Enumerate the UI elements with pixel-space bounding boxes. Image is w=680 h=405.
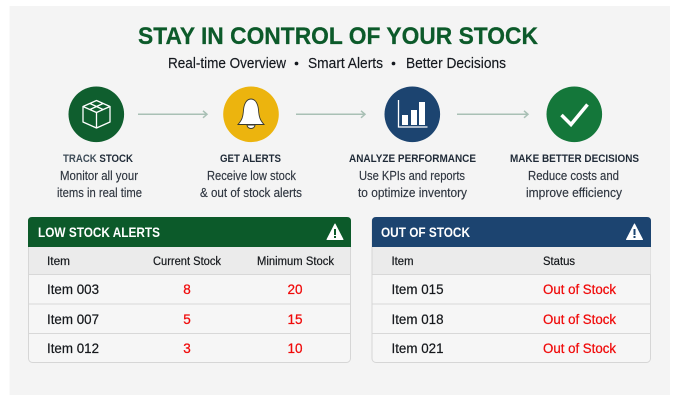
- table text: 8: [183, 282, 191, 297]
- table text: Item 012: [47, 341, 99, 356]
- table text: Item: [392, 256, 414, 268]
- table text: [47, 256, 334, 356]
- title: STAY IN CONTROL OF YOUR STOCK: [138, 23, 538, 50]
- icon: box: [68, 86, 124, 142]
- table text: Status: [543, 256, 575, 268]
- column header band: [29, 247, 350, 274]
- header bar: [28, 217, 351, 247]
- arrow 3: [457, 111, 528, 118]
- table text: Item 007: [47, 312, 99, 327]
- table text: Current Stock: [153, 256, 221, 268]
- step: analyze performance: Use KPIs and reports: [359, 169, 465, 183]
- panel: out of stock: [372, 217, 651, 362]
- table text: 5: [183, 312, 191, 327]
- table text: Item 015: [392, 282, 444, 297]
- step: analyze performance: [349, 153, 476, 200]
- arrow 1: [138, 111, 207, 118]
- table text: Out of Stock: [543, 282, 616, 297]
- step: make better decisions: improve efficiency: [526, 186, 623, 200]
- step: track stock: TRACK STOCK: [63, 153, 133, 165]
- icon: check mark: [546, 86, 602, 142]
- subtitle: Better Decisions: [406, 56, 506, 72]
- step: get alerts: [200, 153, 302, 200]
- column header band: [372, 247, 650, 274]
- table text: Item: [47, 256, 70, 268]
- step: make better decisions: Reduce costs and: [528, 169, 619, 183]
- table text: 20: [287, 282, 303, 297]
- table text: Out of Stock: [543, 341, 616, 356]
- heading: OUT OF STOCK: [381, 224, 470, 240]
- icon: warning: [327, 224, 343, 240]
- panel: low stock alerts: [28, 217, 351, 362]
- step: track stock: items in real time: [57, 186, 142, 200]
- heading: LOW STOCK ALERTS: [38, 224, 160, 240]
- step: analyze performance: to optimize inventory: [358, 186, 468, 200]
- table text: Out of Stock: [543, 312, 616, 327]
- subtitle: [168, 56, 506, 72]
- step: get alerts: & out of stock alerts: [200, 186, 302, 200]
- table text: 3: [183, 341, 191, 356]
- table text: 15: [287, 312, 303, 327]
- subtitle: Real-time Overview: [168, 56, 286, 72]
- icon: bar chart: [384, 86, 440, 142]
- step: track stock: [57, 153, 142, 200]
- arrow 2: [296, 111, 365, 118]
- step: get alerts: Receive low stock: [207, 169, 297, 183]
- table text: Item 021: [392, 341, 444, 356]
- header bar: [372, 217, 651, 247]
- table text: [392, 256, 616, 356]
- table text: 10: [287, 341, 303, 356]
- icon: bell: [223, 86, 279, 142]
- step: get alerts: GET ALERTS: [220, 153, 281, 165]
- table text: Minimum Stock: [257, 256, 334, 268]
- step: analyze performance: ANALYZE PERFORMANCE: [349, 153, 476, 165]
- step: track stock: Monitor all your: [60, 169, 138, 183]
- step: make better decisions: [510, 153, 639, 200]
- table text: Item 003: [47, 282, 99, 297]
- icon: warning: [626, 224, 642, 240]
- step: make better decisions: MAKE BETTER DECISIONS: [510, 153, 639, 165]
- subtitle: Smart Alerts: [308, 56, 383, 72]
- table text: Item 018: [392, 312, 444, 327]
